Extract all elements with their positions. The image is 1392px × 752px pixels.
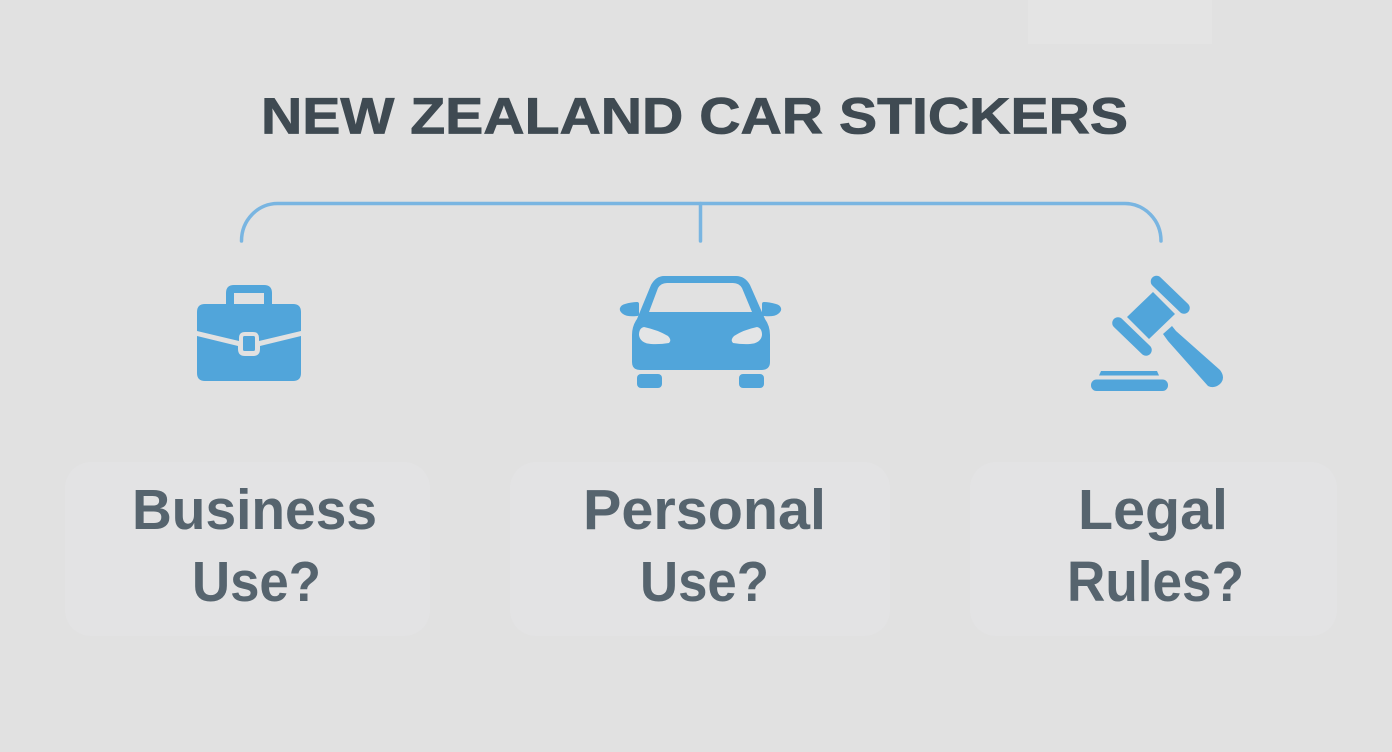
- icon: gavel: [1091, 282, 1223, 391]
- label: legal rules: [1067, 478, 1244, 614]
- label: business use: Business: [132, 478, 377, 542]
- label: legal rules: Legal: [1078, 478, 1228, 542]
- label: personal use: [583, 478, 826, 614]
- label: business use: [132, 478, 377, 614]
- icon: briefcase: [197, 285, 301, 381]
- panel: legal rules: [970, 462, 1337, 636]
- panel: business use: [65, 462, 430, 636]
- label: personal use: Use?: [640, 550, 769, 614]
- title: NEW ZEALAND CAR STICKERS: [261, 88, 1128, 144]
- label: business use: Use?: [192, 550, 321, 614]
- label: legal rules: Rules?: [1067, 550, 1244, 614]
- icon: car: [620, 276, 781, 388]
- bracket connector: [242, 204, 1161, 241]
- label: personal use: Personal: [583, 478, 826, 542]
- panel: personal use: [510, 462, 890, 636]
